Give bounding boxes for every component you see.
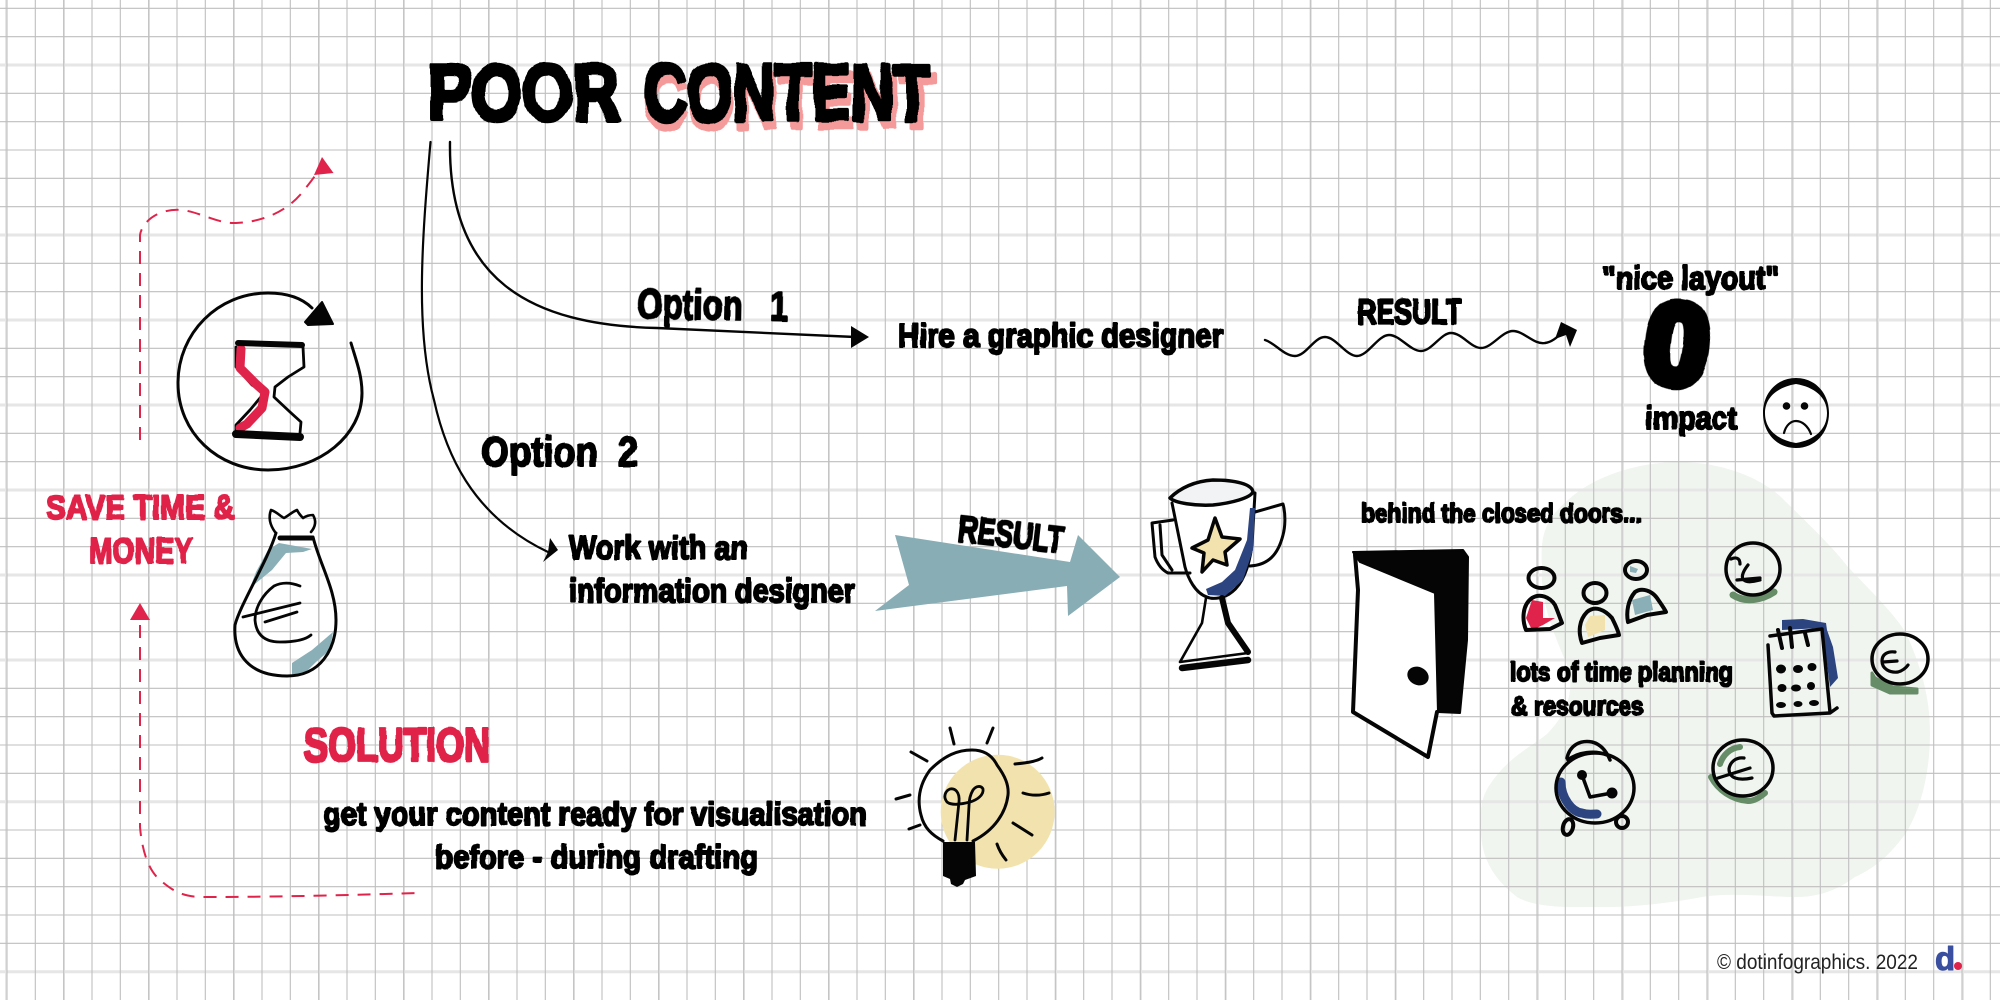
arrowhead: option 2 <box>543 538 558 562</box>
green background blob <box>1480 462 1930 907</box>
branch line: option 2 <box>422 142 548 552</box>
icon: money bag <box>235 510 336 676</box>
big zero: 0 <box>1639 279 1715 412</box>
solution text: before - during drafting <box>435 839 758 875</box>
wavy arrow <box>1265 322 1577 356</box>
logo: d <box>1935 940 1955 977</box>
icon: sad face <box>1763 378 1829 448</box>
option 1 label: Option 1 <box>637 280 789 330</box>
big teal arrow <box>875 535 1120 616</box>
copyright: © dotinfographics. 2022 <box>1717 950 1918 974</box>
lots of time planning text <box>1510 657 1733 721</box>
title: POOR <box>428 48 620 137</box>
save time and money label <box>46 489 235 571</box>
icon: euro coin 1 <box>1726 543 1780 600</box>
icon: light bulb <box>896 728 1055 887</box>
nice layout quote: "nice layout" <box>1602 260 1779 296</box>
lots of time planning text: & resources <box>1511 691 1644 721</box>
solution heading: SOLUTION <box>304 718 490 771</box>
hire text: Hire a graphic designer <box>898 317 1223 354</box>
red dashed arrow: bottom <box>130 603 418 897</box>
curve to option 1 <box>450 142 855 337</box>
icon: three people <box>1524 561 1666 643</box>
icon: calendar <box>1768 619 1838 716</box>
behind the closed doors text: behind the closed doors... <box>1361 498 1642 528</box>
lots of time planning text: lots of time planning <box>1510 657 1733 687</box>
option 2 label: Option 2 <box>481 428 638 475</box>
red dashed arrow: top <box>140 157 334 440</box>
icon: euro coin 3 <box>1711 740 1773 801</box>
icon: hourglass in cycle arrow <box>178 293 362 470</box>
impact label: impact <box>1645 400 1737 436</box>
title: CONTENT <box>644 48 930 137</box>
save time and money label: SAVE TIME & <box>46 489 235 527</box>
title: CONTENT <box>644 56 936 145</box>
icon: open door <box>1353 550 1468 757</box>
result label on arrow: RESULT <box>956 508 1066 561</box>
icon: trophy <box>1152 480 1285 668</box>
work with an information designer text <box>569 529 855 609</box>
title <box>428 48 936 145</box>
icon: euro coin 2 <box>1872 634 1928 693</box>
arrowhead: option 1 <box>851 326 869 348</box>
icon: alarm clock <box>1556 742 1634 836</box>
work with an information designer text: information designer <box>569 572 855 609</box>
work with an information designer text: Work with an <box>569 529 748 566</box>
solution text: get your content ready for visualisation <box>323 796 867 832</box>
result label top: RESULT <box>1357 293 1462 332</box>
save time and money label: MONEY <box>89 532 193 571</box>
solution text <box>323 796 867 875</box>
